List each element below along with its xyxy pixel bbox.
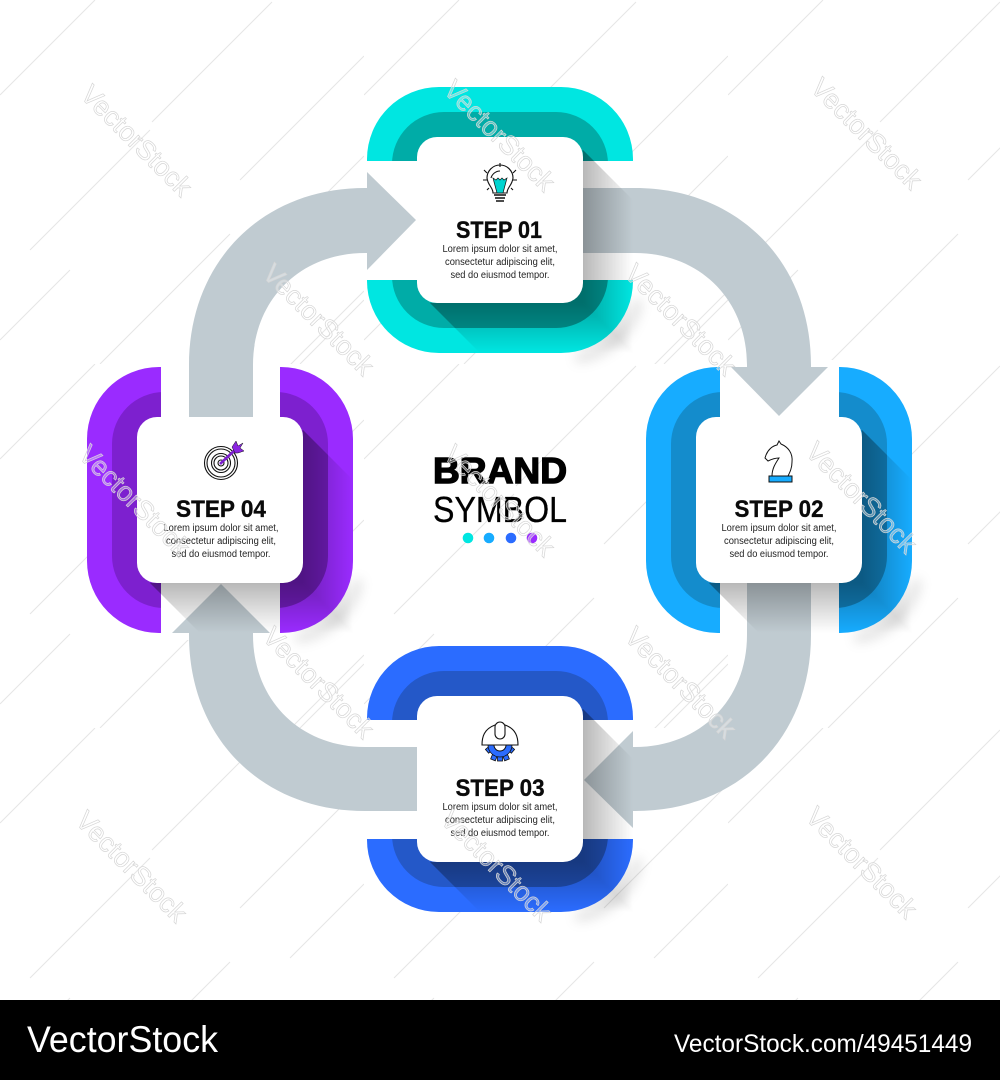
- text: step 03 description: [442, 802, 558, 839]
- arrow: step 01 to step 02: [560, 188, 828, 416]
- footer image id: VectorStock.com/49451449: [674, 1030, 972, 1058]
- badge: step 03 blue: [360, 646, 640, 917]
- text: step 01 description: consectetur adipiscing elit,: [445, 257, 555, 268]
- text: step 01 description: Lorem ipsum dolor sit amet,: [442, 244, 558, 255]
- heading: step 04: STEP 04: [176, 496, 266, 523]
- icon: light bulb: [483, 163, 517, 201]
- text: step 04 description: consectetur adipiscing elit,: [166, 536, 276, 547]
- watermark text: [70, 72, 928, 929]
- text: step 01 description: [442, 244, 558, 281]
- long shadow: step 01 card: [430, 150, 633, 353]
- heading: step 02: STEP 02: [734, 496, 824, 523]
- watermark text: VectorStock: [800, 801, 923, 925]
- panel: step 02: [696, 417, 862, 583]
- text: step 02 description: consectetur adipiscing elit,: [724, 536, 834, 547]
- panel: step 03: [417, 696, 583, 862]
- watermark text: VectorStock: [70, 805, 193, 929]
- watermark text: VectorStock: [75, 79, 198, 203]
- watermark text: VectorStock: [435, 804, 558, 928]
- watermark text: VectorStock: [73, 439, 196, 563]
- title: brand symbol: [433, 450, 567, 530]
- heading: step 01: STEP 01: [456, 217, 542, 244]
- footer logo text: VectorStock: [27, 1019, 218, 1060]
- long shadow: step 02 card: [709, 430, 912, 633]
- icon: helmet and gear: [482, 722, 518, 761]
- watermark text: VectorStock: [805, 72, 928, 196]
- long shadow: step 04 card: [150, 430, 353, 633]
- badge: step 04 purple: [87, 360, 358, 640]
- dots: colour key: [463, 533, 537, 543]
- footer bar: [0, 1000, 1000, 1080]
- icon: target and dart: [204, 441, 244, 480]
- watermark text: VectorStock: [438, 439, 561, 563]
- text: step 02 description: [722, 523, 836, 560]
- text: step 03 description: sed do eiusmod tempor.: [450, 828, 550, 839]
- arrow: step 04 to step 01: [189, 172, 416, 440]
- icon: chess knight: [765, 441, 792, 482]
- badge: step 02 sky blue: [646, 360, 917, 640]
- panel: step 04: [137, 417, 303, 583]
- watermark text: VectorStock: [619, 621, 742, 745]
- watermark text: VectorStock: [438, 74, 561, 198]
- text: step 01 description: sed do eiusmod tempor.: [450, 270, 550, 281]
- text: step 04 description: [164, 523, 278, 560]
- watermark text: VectorStock: [800, 436, 923, 560]
- text: step 04 description: sed do eiusmod tempor.: [172, 549, 270, 560]
- panel: step 01: [417, 137, 583, 303]
- badge: step 01 teal: [360, 87, 640, 358]
- arrow: step 02 to step 03: [584, 560, 811, 828]
- long shadow: step 03 card: [430, 709, 633, 912]
- text: step 03 description: consectetur adipiscing elit,: [445, 815, 555, 826]
- text: step 04 description: Lorem ipsum dolor sit amet,: [164, 523, 278, 534]
- text: step 02 description: Lorem ipsum dolor sit amet,: [722, 523, 836, 534]
- watermark text: VectorStock: [619, 258, 742, 382]
- title: brand symbol: BRAND: [433, 450, 567, 491]
- title: brand symbol: SYMBOL: [433, 489, 567, 530]
- arrow: step 03 to step 04: [172, 584, 440, 811]
- watermark text: VectorStock: [257, 258, 380, 382]
- heading: step 03: STEP 03: [456, 775, 544, 802]
- text: step 03 description: Lorem ipsum dolor sit amet,: [442, 802, 558, 813]
- watermark text: VectorStock: [257, 621, 380, 745]
- text: step 02 description: sed do eiusmod tempor.: [730, 549, 828, 560]
